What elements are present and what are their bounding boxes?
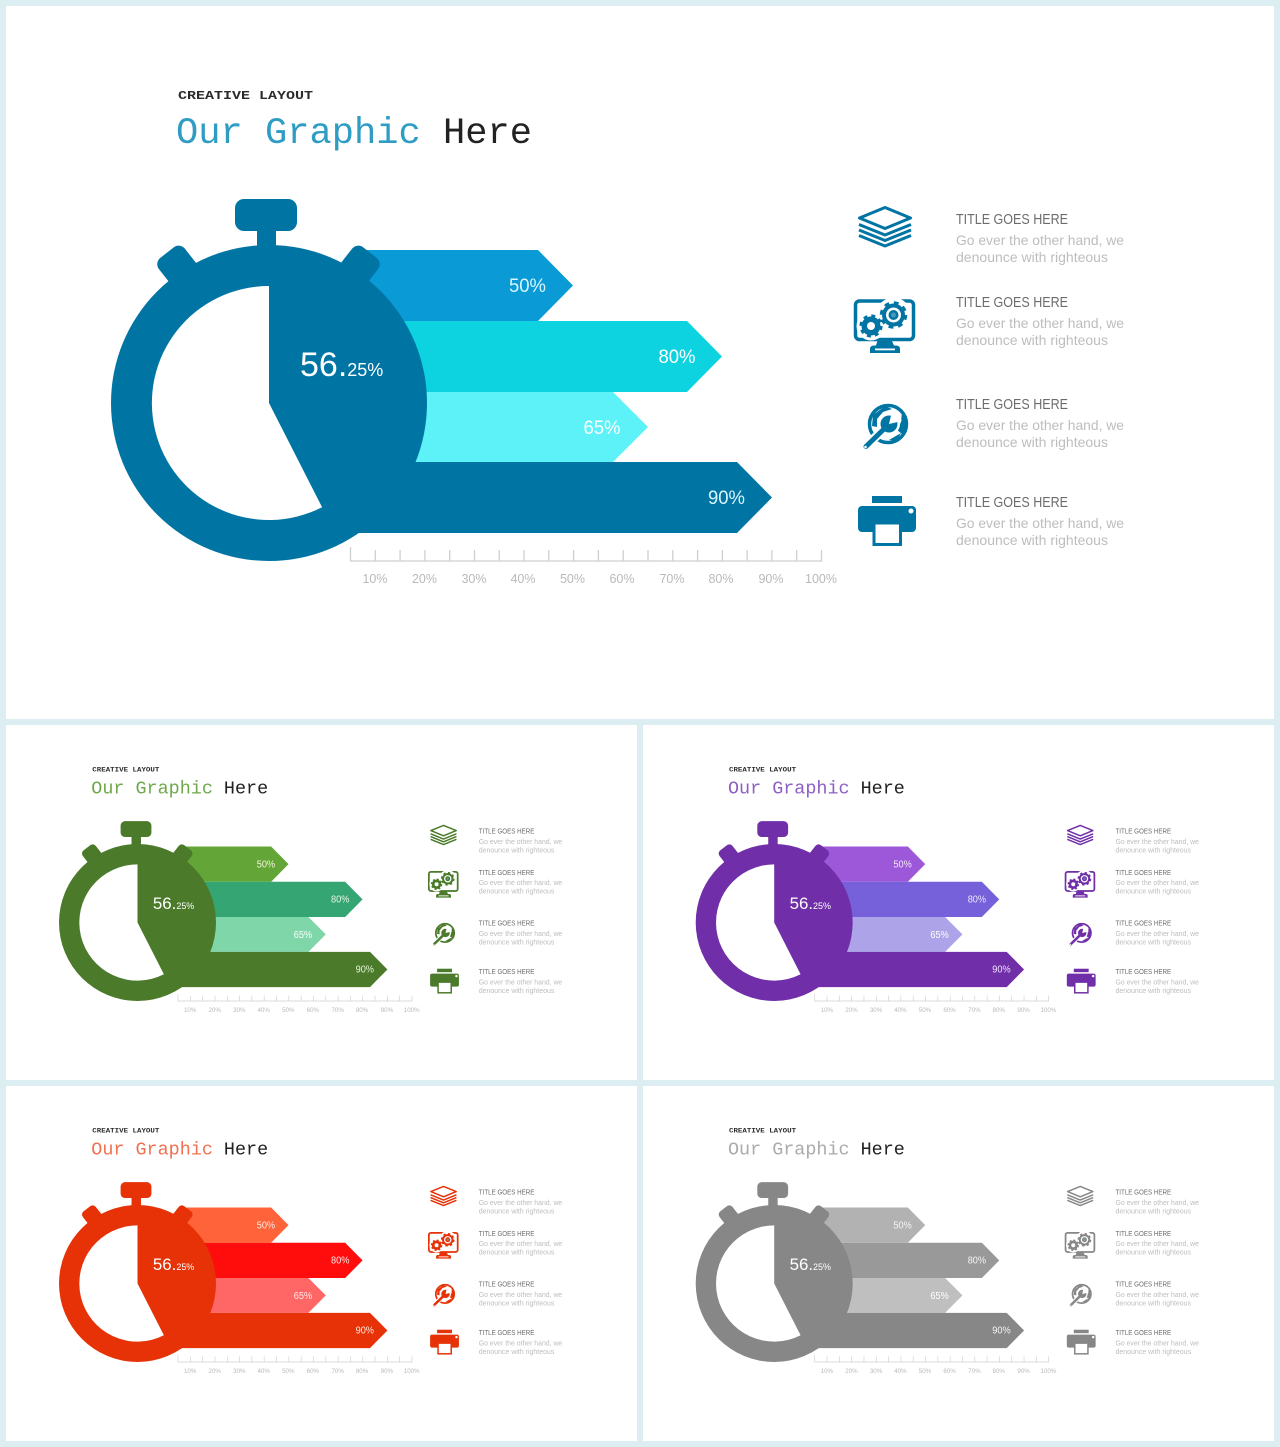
- text block 1: denounce with righteous: [956, 249, 1108, 265]
- text block 4: denounce with righteous: [956, 532, 1108, 548]
- percentage ruler: 80%: [993, 1007, 1005, 1014]
- icon: monitor with gears: [429, 1231, 458, 1259]
- percentage ruler: 10%: [362, 572, 388, 586]
- percentage ruler: 70%: [659, 572, 685, 586]
- stopwatch: 56.25%: [790, 894, 831, 913]
- icon: monitor with gears: [429, 870, 458, 898]
- arrow bar chart: [790, 846, 1024, 987]
- arrow bar chart: [153, 846, 387, 987]
- percentage ruler: 100%: [404, 1368, 420, 1375]
- percentage ruler: 10%: [821, 1007, 834, 1014]
- text block 2: Go ever the other hand, we: [479, 1241, 562, 1248]
- percentage ruler: 40%: [894, 1007, 907, 1014]
- text block 1: TITLE GOES HERE: [479, 827, 534, 836]
- percentage ruler: 80%: [356, 1007, 369, 1014]
- percentage ruler: 40%: [257, 1368, 270, 1375]
- icon: layers: [431, 825, 456, 845]
- percentage ruler: 20%: [412, 572, 437, 586]
- eyebrow: CREATIVE LAYOUT: [729, 766, 797, 773]
- icon: wrench and globe: [433, 1285, 454, 1306]
- stopwatch: [59, 821, 216, 1001]
- percentage ruler: [815, 1355, 1057, 1375]
- stopwatch: [696, 1182, 853, 1362]
- arrow bar chart: [790, 1208, 1024, 1348]
- text block 2: [956, 294, 1124, 348]
- arrow bar chart: 90%: [356, 1326, 374, 1337]
- text block 1: [1116, 827, 1199, 854]
- text block 4: TITLE GOES HERE: [956, 494, 1068, 511]
- percentage ruler: 100%: [404, 1007, 420, 1014]
- icon: printer: [858, 496, 916, 544]
- arrow bar chart: 90%: [708, 487, 745, 509]
- text block 1: denounce with righteous: [479, 847, 555, 854]
- text block 4: TITLE GOES HERE: [1116, 1328, 1171, 1337]
- percentage ruler: 10%: [184, 1368, 197, 1375]
- percentage ruler: 50%: [560, 572, 585, 586]
- percentage ruler: 40%: [257, 1007, 270, 1014]
- text block 1: Go ever the other hand, we: [479, 839, 562, 846]
- panel: main blue slide: [6, 6, 1274, 719]
- title: Our Graphic Here: [91, 778, 268, 799]
- stopwatch: 56.25%: [153, 1255, 194, 1274]
- arrow bar chart: 90%: [992, 1326, 1011, 1337]
- text block 2: Go ever the other hand, we: [1116, 880, 1199, 887]
- icon: layers: [1067, 825, 1093, 845]
- text block 4: [479, 967, 562, 995]
- arrow bar chart: 50%: [509, 275, 546, 297]
- percentage ruler: 70%: [331, 1007, 344, 1014]
- icon: monitor with gears: [1066, 870, 1094, 898]
- text block 4: Go ever the other hand, we: [1116, 1341, 1199, 1348]
- percentage ruler: 90%: [1017, 1368, 1030, 1375]
- text block 4: TITLE GOES HERE: [479, 1328, 534, 1337]
- text block 3: Go ever the other hand, we: [1116, 1292, 1199, 1299]
- icon: layers: [859, 208, 911, 246]
- arrow bar chart: 80%: [968, 1256, 986, 1267]
- percentage ruler: 50%: [919, 1368, 932, 1375]
- icon: monitor with gears: [1066, 1231, 1094, 1259]
- text block 3: [1116, 918, 1199, 946]
- title: Our Graphic Here: [91, 1139, 268, 1160]
- text block 3: TITLE GOES HERE: [479, 918, 534, 927]
- eyebrow: CREATIVE LAYOUT: [92, 766, 160, 773]
- icon: wrench and globe: [1070, 1285, 1091, 1306]
- text block 4: [956, 494, 1124, 548]
- text block 3: TITLE GOES HERE: [956, 396, 1068, 413]
- text block 1: [479, 1188, 562, 1215]
- text block 2: [1116, 1229, 1199, 1257]
- percentage ruler: 90%: [381, 1368, 394, 1375]
- percentage ruler: 10%: [821, 1368, 834, 1375]
- stopwatch: [696, 821, 853, 1001]
- text block 4: [1116, 967, 1199, 995]
- text block 1: denounce with righteous: [1116, 847, 1192, 854]
- percentage ruler: 30%: [870, 1368, 883, 1375]
- text block 1: TITLE GOES HERE: [1116, 827, 1171, 836]
- text block 4: denounce with righteous: [1116, 988, 1192, 995]
- text block 3: denounce with righteous: [1116, 939, 1192, 946]
- text block 1: TITLE GOES HERE: [956, 211, 1068, 228]
- text block 4: Go ever the other hand, we: [479, 980, 562, 987]
- percentage ruler: 70%: [968, 1368, 981, 1375]
- text block 1: denounce with righteous: [479, 1208, 555, 1215]
- percentage ruler: 60%: [609, 572, 635, 586]
- percentage ruler: 80%: [708, 572, 734, 586]
- eyebrow: CREATIVE LAYOUT: [178, 89, 313, 103]
- stopwatch: [111, 199, 427, 561]
- percentage ruler: 60%: [943, 1368, 956, 1375]
- percentage ruler: 100%: [805, 572, 837, 586]
- text block 1: Go ever the other hand, we: [956, 232, 1124, 248]
- text block 4: denounce with righteous: [479, 988, 555, 995]
- text block 3: denounce with righteous: [956, 434, 1108, 450]
- percentage ruler: 80%: [993, 1368, 1005, 1375]
- arrow bar chart: 80%: [968, 895, 986, 906]
- text block 3: denounce with righteous: [479, 939, 555, 946]
- icon: monitor with gears: [856, 298, 914, 353]
- percentage ruler: 60%: [307, 1368, 320, 1375]
- text block 3: [479, 918, 562, 946]
- text block 4: TITLE GOES HERE: [1116, 967, 1171, 976]
- text block 2: denounce with righteous: [956, 332, 1108, 348]
- percentage ruler: 20%: [209, 1007, 221, 1014]
- text block 3: denounce with righteous: [479, 1300, 555, 1307]
- text block 1: [1116, 1188, 1199, 1215]
- text block 2: TITLE GOES HERE: [479, 868, 534, 877]
- panel: purple slide: [643, 725, 1274, 1080]
- icon: printer: [1067, 1330, 1096, 1354]
- percentage ruler: 30%: [233, 1007, 246, 1014]
- arrow bar chart: 65%: [294, 1291, 313, 1302]
- text block 2: denounce with righteous: [1116, 1250, 1192, 1257]
- text block 2: TITLE GOES HERE: [479, 1229, 534, 1238]
- text block 3: Go ever the other hand, we: [956, 417, 1124, 433]
- text block 1: TITLE GOES HERE: [479, 1188, 534, 1197]
- text block 2: TITLE GOES HERE: [1116, 868, 1171, 877]
- text block 2: [479, 868, 562, 896]
- text block 3: TITLE GOES HERE: [1116, 1279, 1171, 1288]
- text block 2: denounce with righteous: [479, 1250, 555, 1257]
- arrow bar chart: 65%: [294, 930, 313, 941]
- title: Our Graphic Here: [728, 1139, 905, 1160]
- text block 3: Go ever the other hand, we: [1116, 931, 1199, 938]
- text block 1: [956, 211, 1124, 265]
- stopwatch: 56.25%: [153, 894, 194, 913]
- panel: green slide: [6, 725, 637, 1080]
- percentage ruler: [178, 1355, 420, 1375]
- text block 2: Go ever the other hand, we: [1116, 1241, 1199, 1248]
- arrow bar chart: [153, 1208, 387, 1348]
- title: Our Graphic Here: [728, 778, 905, 799]
- percentage ruler: 60%: [943, 1007, 956, 1014]
- percentage ruler: 10%: [184, 1007, 197, 1014]
- text block 1: TITLE GOES HERE: [1116, 1188, 1171, 1197]
- text block 4: Go ever the other hand, we: [956, 515, 1124, 531]
- text block 1: [479, 827, 562, 854]
- text block 2: TITLE GOES HERE: [956, 294, 1068, 311]
- percentage ruler: 30%: [870, 1007, 883, 1014]
- text block 3: TITLE GOES HERE: [479, 1279, 534, 1288]
- percentage ruler: [178, 994, 420, 1014]
- text block 2: Go ever the other hand, we: [956, 315, 1124, 331]
- stopwatch: [59, 1182, 216, 1362]
- arrow bar chart: 90%: [992, 965, 1011, 976]
- stopwatch: 56.25%: [790, 1255, 831, 1274]
- percentage ruler: 100%: [1040, 1007, 1057, 1014]
- text block 2: Go ever the other hand, we: [479, 880, 562, 887]
- arrow bar chart: [300, 250, 772, 533]
- arrow bar chart: 50%: [893, 1220, 912, 1231]
- text block 1: denounce with righteous: [1116, 1208, 1192, 1215]
- panel: gray slide: [643, 1086, 1274, 1441]
- text block 4: denounce with righteous: [479, 1349, 555, 1356]
- percentage ruler: 70%: [331, 1368, 344, 1375]
- icon: wrench and globe: [864, 406, 907, 448]
- text block 3: [1116, 1279, 1199, 1307]
- arrow bar chart: 65%: [584, 417, 620, 439]
- text block 4: denounce with righteous: [1116, 1349, 1192, 1356]
- text block 3: Go ever the other hand, we: [479, 1292, 562, 1299]
- arrow bar chart: 80%: [331, 895, 350, 906]
- arrow bar chart: 65%: [930, 930, 949, 941]
- percentage ruler: [350, 547, 837, 586]
- text block 1: Go ever the other hand, we: [1116, 839, 1199, 846]
- title: Our Graphic Here: [176, 113, 532, 155]
- percentage ruler: 90%: [758, 572, 784, 586]
- text block 2: denounce with righteous: [479, 889, 555, 896]
- icon: printer: [430, 969, 459, 993]
- text block 1: Go ever the other hand, we: [479, 1200, 562, 1207]
- arrow bar chart: 50%: [257, 859, 275, 870]
- percentage ruler: 80%: [356, 1368, 369, 1375]
- eyebrow: CREATIVE LAYOUT: [92, 1127, 160, 1134]
- text block 2: denounce with righteous: [1116, 889, 1192, 896]
- percentage ruler: 90%: [1017, 1007, 1030, 1014]
- arrow bar chart: 90%: [356, 965, 374, 976]
- eyebrow: CREATIVE LAYOUT: [729, 1127, 797, 1134]
- stopwatch: 56.25%: [300, 346, 383, 384]
- percentage ruler: 50%: [282, 1368, 295, 1375]
- percentage ruler: 70%: [968, 1007, 981, 1014]
- percentage ruler: 40%: [510, 572, 536, 586]
- arrow bar chart: 65%: [930, 1291, 949, 1302]
- percentage ruler: 90%: [381, 1007, 394, 1014]
- arrow bar chart: 50%: [893, 859, 912, 870]
- percentage ruler: 20%: [845, 1007, 858, 1014]
- icon: layers: [431, 1186, 456, 1206]
- text block 1: Go ever the other hand, we: [1116, 1200, 1199, 1207]
- text block 2: [479, 1229, 562, 1257]
- percentage ruler: 20%: [209, 1368, 221, 1375]
- text block 4: Go ever the other hand, we: [1116, 980, 1199, 987]
- panel: red slide: [6, 1086, 637, 1441]
- text block 4: TITLE GOES HERE: [479, 967, 534, 976]
- arrow bar chart: 80%: [658, 346, 696, 368]
- text block 2: [1116, 868, 1199, 896]
- text block 4: Go ever the other hand, we: [479, 1341, 562, 1348]
- percentage ruler: [815, 994, 1057, 1014]
- icon: wrench and globe: [433, 924, 454, 945]
- percentage ruler: 30%: [233, 1368, 246, 1375]
- arrow bar chart: 80%: [331, 1256, 350, 1267]
- text block 4: [1116, 1328, 1199, 1356]
- percentage ruler: 100%: [1040, 1368, 1057, 1375]
- percentage ruler: 50%: [282, 1007, 295, 1014]
- text block 3: [479, 1279, 562, 1307]
- percentage ruler: 50%: [919, 1007, 932, 1014]
- text block 3: TITLE GOES HERE: [1116, 918, 1171, 927]
- icon: printer: [430, 1330, 459, 1354]
- percentage ruler: 60%: [307, 1007, 320, 1014]
- percentage ruler: 30%: [461, 572, 487, 586]
- text block 4: [479, 1328, 562, 1356]
- icon: printer: [1067, 969, 1096, 993]
- percentage ruler: 40%: [894, 1368, 907, 1375]
- text block 2: TITLE GOES HERE: [1116, 1229, 1171, 1238]
- arrow bar chart: 50%: [257, 1220, 275, 1231]
- icon: wrench and globe: [1070, 924, 1091, 945]
- text block 3: denounce with righteous: [1116, 1300, 1192, 1307]
- icon: layers: [1067, 1186, 1093, 1206]
- percentage ruler: 20%: [845, 1368, 858, 1375]
- text block 3: Go ever the other hand, we: [479, 931, 562, 938]
- text block 3: [956, 396, 1124, 450]
